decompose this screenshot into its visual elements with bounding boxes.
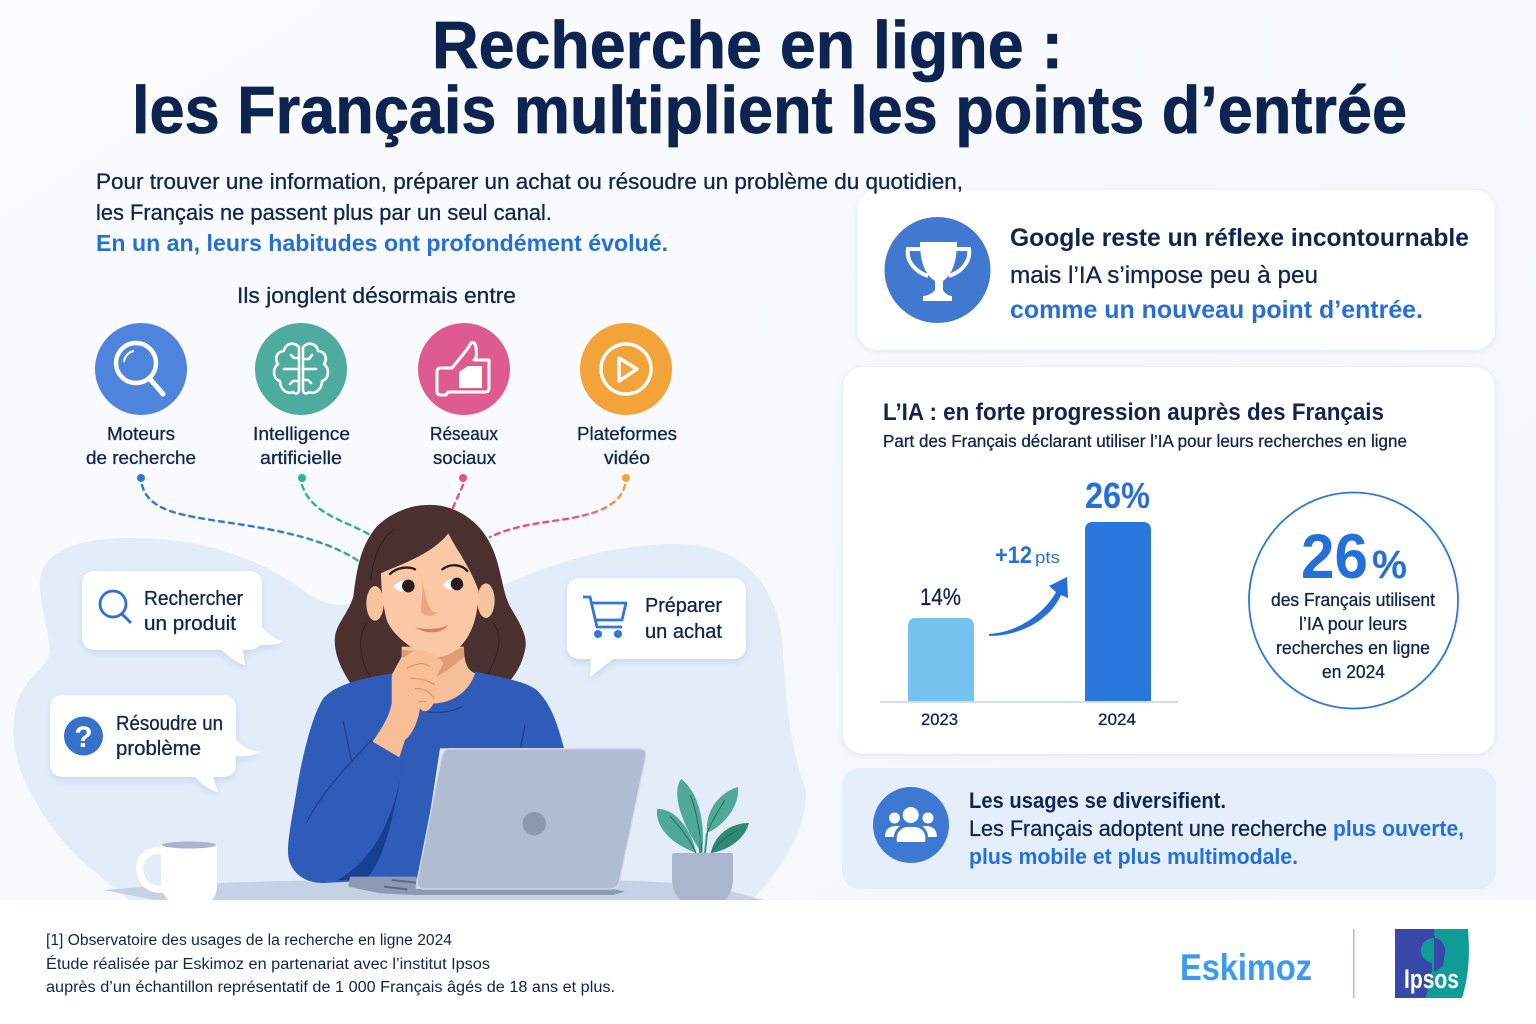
intro text: En un an, leurs habitudes ont profondément évolué. xyxy=(96,230,668,256)
bubble: rechercher un produit: Rechercher xyxy=(144,588,243,610)
bubble: préparer un achat: Préparer xyxy=(645,595,722,617)
footnote: auprès d’un échantillon représentatif de 1 000 Français âgés de 18 ans et plus. xyxy=(46,979,615,996)
bar chart xyxy=(880,475,1178,729)
icon: magnifier xyxy=(116,343,163,394)
sweater folds xyxy=(306,706,525,823)
panel: chart xyxy=(843,367,1495,754)
channel: réseaux sociaux xyxy=(418,323,510,468)
bubble: rechercher un produit: un produit xyxy=(144,613,236,635)
pot xyxy=(672,853,733,900)
sweater shadow xyxy=(337,760,403,881)
desk xyxy=(104,879,763,900)
panel: Google xyxy=(857,190,1495,350)
delta label xyxy=(995,542,1060,569)
icon: shopping cart xyxy=(583,597,626,638)
title xyxy=(132,8,1407,148)
mouth xyxy=(415,625,448,632)
stat circle: 26 xyxy=(1301,522,1368,592)
icon: question mark: ? xyxy=(74,721,93,754)
channel: plateformes vidéo: Plateformes xyxy=(577,423,677,444)
stat circle xyxy=(1249,492,1458,708)
panel: usages: plus mobile et plus multimodale. xyxy=(969,844,1298,869)
icon: thumbs up xyxy=(437,342,489,395)
icon: play xyxy=(601,344,651,394)
background blob xyxy=(13,538,806,900)
stems xyxy=(700,833,707,853)
footer xyxy=(0,900,1536,1024)
laptop logo xyxy=(523,812,546,835)
laptop base xyxy=(348,877,625,895)
channel: réseaux sociaux: sociaux xyxy=(433,447,497,468)
hair strands xyxy=(361,530,499,677)
icon: question mark xyxy=(64,716,103,756)
channel: moteurs de recherche: de recherche xyxy=(86,447,196,468)
leaves xyxy=(657,779,749,853)
bar chart: 14% xyxy=(920,584,961,611)
panel: usages xyxy=(842,768,1496,889)
bubble: préparer un achat xyxy=(567,578,746,677)
intro text xyxy=(96,169,963,256)
bar 2024 xyxy=(1085,522,1151,701)
sweater xyxy=(288,672,564,883)
illustration: woman at laptop xyxy=(288,505,646,895)
icon: group of people xyxy=(873,787,949,863)
divider xyxy=(1353,929,1354,998)
channel: intelligence artificielle xyxy=(253,323,350,468)
plant xyxy=(657,779,749,900)
channel: réseaux sociaux: Réseaux xyxy=(430,423,499,444)
icon: magnifier xyxy=(100,591,131,623)
panel: usages: Les Français adoptent une recherche xyxy=(969,816,1327,841)
title: Recherche en ligne : xyxy=(432,8,1063,83)
laptop hinge slits xyxy=(384,880,416,889)
icon: trophy xyxy=(884,217,990,323)
panel: Google: Google reste un réflexe incontournable xyxy=(1010,224,1469,252)
footnote: [1] Observatoire des usages de la recherche en ligne 2024 xyxy=(46,932,452,949)
bar chart: 26% xyxy=(1085,475,1150,516)
subheading: Ils jonglent désormais entre xyxy=(237,283,516,308)
channel: plateformes vidéo: vidéo xyxy=(604,447,650,468)
intro text: Pour trouver une information, préparer un achat ou résoudre un problème du quotidien, xyxy=(96,169,963,194)
bubble: rechercher un produit xyxy=(82,571,284,665)
bubble: préparer un achat: un achat xyxy=(645,621,722,643)
stat circle: % xyxy=(1372,543,1407,587)
hand xyxy=(373,651,443,757)
face xyxy=(381,533,478,657)
panel: Google: comme un nouveau point d’entrée. xyxy=(1010,296,1423,324)
ears xyxy=(366,586,384,621)
laptop lid xyxy=(417,749,646,889)
logo: Eskimoz: Eskimoz xyxy=(1180,947,1312,988)
icon: brain xyxy=(274,344,328,393)
delta label: pts xyxy=(1035,548,1060,567)
stat circle: des Français utilisent xyxy=(1271,590,1435,610)
eyes and brows xyxy=(390,565,467,592)
bar 2023 xyxy=(908,618,974,701)
channel: moteurs de recherche: Moteurs xyxy=(107,423,175,444)
hair xyxy=(335,505,526,683)
panel: usages: Les usages se diversifient. xyxy=(969,788,1226,813)
dashed connectors xyxy=(137,474,630,562)
channel: intelligence artificielle: Intelligence xyxy=(253,423,350,444)
panel: chart: Part des Français déclarant utiliser l’IA pour leurs recherches en ligne xyxy=(883,431,1407,451)
arrow xyxy=(989,577,1068,636)
bubble: résoudre un problème xyxy=(50,695,260,792)
footnote: Étude réalisée par Eskimoz en partenariat avec l’institut Ipsos xyxy=(46,956,490,973)
logo: Ipsos: Ipsos xyxy=(1404,964,1459,994)
bar chart: 2023 xyxy=(921,710,958,729)
channel: plateformes vidéo xyxy=(577,323,677,468)
mug xyxy=(140,842,217,900)
title: les Français multiplient les points d’entrée xyxy=(132,73,1407,148)
nose xyxy=(421,578,437,616)
stat circle: recherches en ligne xyxy=(1276,638,1430,658)
panel: Google: mais l’IA s’impose peu à peu xyxy=(1010,262,1318,289)
stat circle: l’IA pour leurs xyxy=(1299,614,1407,634)
logo: Ipsos xyxy=(1395,929,1469,998)
panel: usages: plus ouverte, xyxy=(1333,816,1464,841)
footnote xyxy=(46,932,615,996)
channel: moteurs de recherche xyxy=(86,323,196,468)
bubble: résoudre un problème: Résoudre un xyxy=(116,713,223,735)
bar chart: 2024 xyxy=(1098,710,1136,729)
leaf veins xyxy=(670,795,738,853)
neck xyxy=(392,647,475,703)
channel: intelligence artificielle: artificielle xyxy=(260,447,342,468)
stat circle: en 2024 xyxy=(1322,662,1385,682)
intro text: les Français ne passent plus par un seul canal. xyxy=(96,200,552,225)
bubble: résoudre un problème: problème xyxy=(116,738,201,760)
panel: chart: L’IA : en forte progression auprès des Français xyxy=(883,399,1384,426)
delta label: +12 xyxy=(995,542,1032,569)
